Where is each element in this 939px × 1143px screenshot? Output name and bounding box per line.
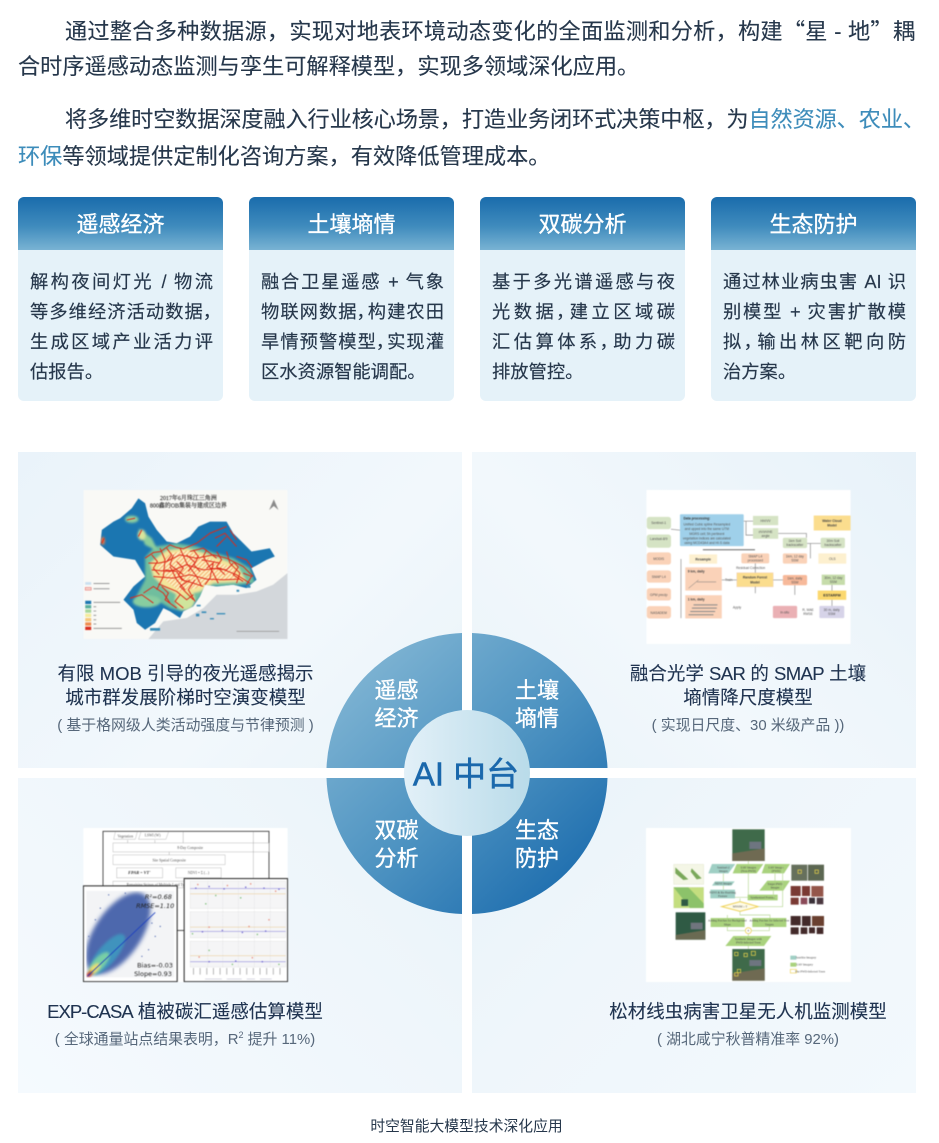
image: SMAP downscaling flow diagram: Apply (733, 605, 742, 609)
card: 土壤墒情: 融合卫星遥感 + 气象 (261, 271, 444, 292)
image: SMAP downscaling flow diagram: SSM (830, 580, 837, 584)
image: EXP-CASA flow chart and scatter plots: Remaining Strings of Multiple Land Types (127, 883, 190, 887)
title: night-light model: 有限 MOB 引导的夜光遥感揭示 (58, 663, 313, 684)
image: SMAP downscaling flow diagram: SSM (791, 580, 799, 584)
quadrant: 生态防护: 防护 (515, 846, 559, 871)
image: SMAP downscaling flow diagram: SSM (791, 559, 799, 563)
image: pine wilt monitoring flow diagram: MSSIM ≥ T (733, 905, 747, 909)
intro paragraph 2: 环保等领域提供定制化咨询方案，有效降低管理成本。 (18, 144, 550, 169)
title: SMAP downscaling model: 墒情降尺度模型 (683, 687, 813, 708)
image: SMAP downscaling flow diagram: SMAP L4 (652, 575, 666, 579)
quadrant: 遥感经济 (326, 633, 462, 768)
image: SMAP downscaling flow diagram: 1 km, daily (688, 598, 705, 602)
subtitle: pine wilt model: ( 湖北咸宁秋普精准率 92%) (657, 1032, 839, 1048)
card: 双碳分析: 双碳分析 (538, 212, 626, 237)
image: Pearl River Delta night-light map: 800鑫的OB集装与建成区边界 (150, 502, 227, 510)
image: pine wilt monitoring flow diagram: NDVI Images (715, 881, 733, 885)
image: SMAP downscaling flow diagram: 30m, 12 day (824, 576, 843, 580)
image: SMAP downscaling flow diagram: RMSE (803, 612, 814, 616)
image: SMAP downscaling flow diagram: 1km Soil (788, 539, 801, 543)
image: pine wilt monitoring flow diagram: Images (771, 886, 780, 890)
image: SMAP downscaling flow diagram: Landsat-8/9 (650, 537, 668, 541)
intro paragraph 2: 将多维时空数据深度融入行业核心场景，打造业务闭环式决策中枢，为自然资源、农业、 (65, 107, 925, 132)
card: 土壤墒情 (249, 197, 454, 401)
card: 遥感经济: 等多维经济活动数据， (30, 301, 213, 322)
quadrant: 双碳分析: 分析 (374, 846, 419, 871)
title: pine wilt model: 松材线虫病害卫星无人机监测模型 (609, 1001, 887, 1022)
card: 生态防护: 通过林业病虫害 AI 识 (723, 271, 906, 292)
image: SMAP downscaling flow diagram: vegetation indices are calculated (683, 536, 731, 540)
image: pine wilt monitoring flow diagram: Target PWD (768, 882, 783, 886)
image: pine wilt monitoring flow diagram (646, 828, 851, 982)
title: EXP-CASA model: EXP-CASA 植被碳汇遥感估算模型 (47, 1001, 323, 1022)
image: SMAP downscaling flow diagram: and upped into the same UTM (685, 527, 729, 531)
image: SMAP downscaling flow diagram: MODIS (653, 557, 665, 561)
quadrant: 土壤墒情: 墒情 (515, 706, 559, 731)
image: SMAP downscaling flow diagram: 9 km, daily (688, 569, 705, 573)
image: SMAP downscaling flow diagram: 30 m, daily (824, 608, 840, 612)
image: pine wilt monitoring flow diagram: Feature (718, 894, 728, 898)
image: pine wilt monitoring flow diagram: Satellite Imagery (796, 956, 817, 960)
image: pine wilt monitoring flow diagram: (PWD) (772, 869, 780, 873)
image: SMAP downscaling flow diagram: ESTARFM (823, 594, 841, 598)
image: SMAP downscaling flow diagram: Water Cloud (822, 519, 842, 523)
card: 遥感经济: 估报告。 (30, 361, 103, 382)
image: EXP-CASA flow chart and scatter plots (82, 828, 289, 983)
image: pine wilt monitoring flow diagram: Adding Patches for Background (708, 919, 747, 923)
image: pine wilt monitoring flow diagram: Synthetic Images with (735, 937, 762, 941)
hub: AI 中台 (404, 710, 530, 836)
title: night-light model: 城市群发展阶梯时空演变模型 (65, 687, 306, 708)
image: SMAP downscaling flow diagram: Data processing: (684, 517, 710, 521)
quadrant: 土壤墒情: 土壤 (515, 678, 559, 703)
title: SMAP downscaling model (630, 663, 866, 708)
image: EXP-CASA flow chart and scatter plots: NDVI = Σ (...) (188, 871, 210, 875)
image: SMAP downscaling flow diagram: OLS (829, 557, 836, 561)
subtitle: EXP-CASA model: ( 全球通量站点结果表明，R2 提升 11%) (55, 1030, 315, 1048)
image: SMAP downscaling flow diagram: Random Forest (743, 576, 768, 580)
panel: EXP-CASA model (18, 778, 462, 1093)
card: 土壤墒情: 区水资源智能调配。 (261, 361, 426, 382)
image: pine wilt monitoring flow diagram: Targets (765, 922, 775, 926)
image: pine wilt monitoring flow diagram: PWD-Infected Trees (736, 941, 762, 945)
intro paragraph 1 (18, 14, 915, 79)
image: EXP-CASA flow chart and scatter plots: Site Spatial Composite (153, 858, 186, 862)
image: SMAP downscaling flow diagram: HH/VV (761, 519, 771, 523)
image: SMAP downscaling flow diagram: SSM (828, 612, 835, 616)
image: SMAP downscaling flow diagram: NASADEM (651, 611, 667, 615)
chart: AI platform quadrant wheel (326, 633, 608, 914)
image: SMAP downscaling flow diagram: R, MAE (802, 608, 815, 612)
card: 双碳分析: 排放管控。 (492, 361, 583, 382)
image: SMAP downscaling flow diagram (646, 490, 852, 644)
image: SMAP downscaling flow diagram: Model (827, 524, 837, 528)
intro paragraph 2 (18, 107, 925, 169)
card: 双碳分析: 光数据，建立区域碳 (492, 301, 675, 322)
image: pine wilt monitoring flow diagram: Images (719, 869, 728, 873)
image: SMAP downscaling flow diagram: 1km, daily (787, 576, 803, 580)
image: EXP-CASA flow chart and scatter plots: 8-Day Composite (177, 846, 203, 850)
hub: AI 中台: AI 中台 (413, 756, 519, 792)
image: SMAP downscaling flow diagram: 30m Soil (827, 539, 840, 543)
panel: night-light model (18, 452, 462, 768)
image: SMAP downscaling flow diagram: in-situ (780, 610, 789, 614)
card: 双碳分析: 汇估算体系，助力碳 (492, 331, 675, 352)
quadrant: 生态防护: 生态 (515, 818, 559, 843)
image: EXP-CASA flow chart and scatter plots: LSWI (W) (145, 834, 161, 838)
image: pine wilt monitoring flow diagram: UAV Images (741, 866, 757, 870)
image: pine wilt monitoring flow diagram: Adding Patches for Infected Tree (749, 919, 790, 923)
image: pine wilt monitoring flow diagram: UAV Images (768, 866, 785, 870)
card: 土壤墒情: 土壤墒情 (307, 212, 396, 237)
title: night-light model (58, 663, 313, 708)
card: 生态防护 (711, 197, 916, 401)
quadrant: 遥感经济: 经济 (374, 706, 419, 731)
card: 遥感经济 (18, 197, 223, 401)
caption: 时空智能大模型技术深化应用 (370, 1119, 563, 1135)
image: SMAP downscaling flow diagram: backscatter (786, 543, 804, 547)
image: SMAP downscaling flow diagram: Train (725, 578, 733, 582)
card: 双碳分析 (480, 197, 685, 401)
image: SMAP downscaling flow diagram: Residual Correction (736, 566, 765, 570)
image: SMAP downscaling flow diagram: processed (748, 558, 763, 562)
image: SMAP downscaling flow diagram: Sentinel-1 (651, 521, 666, 525)
card: 双碳分析: 基于多光谱遥感与夜 (492, 271, 675, 292)
card: 生态防护: 别模型 + 灾害扩散模 (723, 301, 906, 322)
image: pine wilt monitoring flow diagram: Sentinel-2 (717, 865, 730, 869)
quadrant: 双碳分析 (326, 778, 462, 914)
image: SMAP downscaling flow diagram: σV/σVHE (759, 530, 773, 534)
quadrant: 土壤墒情 (472, 633, 608, 768)
image: pine wilt monitoring flow diagram: NDVI & Re-Enabling (709, 890, 736, 894)
image: pine wilt monitoring flow diagram: Synthesized Feature (751, 896, 775, 900)
image: pine wilt monitoring flow diagram: The PWD-Infected Trees (795, 969, 826, 973)
image: SMAP downscaling flow diagram: backscatter (825, 543, 842, 547)
card: 土壤墒情: 旱情预警模型，实现灌 (261, 331, 444, 352)
quadrant: 生态防护 (472, 778, 608, 914)
image: EXP-CASA flow chart and scatter plots: Vegetation (118, 834, 133, 838)
image: SMAP downscaling flow diagram: MGRS cell; 5h pertinent (689, 532, 724, 536)
image: EXP-CASA flow chart and scatter plots: Slope=0.93 (134, 970, 172, 978)
image: SMAP downscaling flow diagram: Unified Cubic spline Resampled (683, 523, 730, 527)
image: EXP-CASA flow chart and scatter plots: Bias=-0.03 (137, 961, 173, 969)
image: EXP-CASA flow chart and scatter plots: RMSE=1.10 (136, 902, 174, 910)
image: SMAP downscaling flow diagram: using MCD43A4 and HI-S data (684, 541, 730, 545)
image: SMAP downscaling flow diagram: 1km, 12 day (786, 555, 804, 559)
card: 遥感经济: 生成区域产业活力评 (30, 331, 213, 352)
card: 生态防护: 拟，输出林区靶向防 (723, 331, 906, 352)
card: 遥感经济: 解构夜间灯光 / 物流 (30, 271, 213, 292)
image: pine wilt monitoring flow diagram: + (747, 928, 750, 933)
title: SMAP downscaling model: 融合光学 SAR 的 SMAP 土壤 (630, 663, 866, 684)
image: EXP-CASA flow chart and scatter plots: FPAR = VT' (128, 870, 151, 875)
image: SMAP downscaling flow diagram: SMAP L4 (748, 554, 762, 558)
image: SMAP downscaling flow diagram: Model (750, 580, 760, 584)
image: EXP-CASA flow chart and scatter plots: R²=0.68 (145, 893, 172, 901)
card: 生态防护: 生态防护 (769, 212, 858, 237)
image: Pearl River Delta night-light map (84, 490, 288, 640)
panel: SMAP downscaling model (472, 452, 916, 768)
image: pine wilt monitoring flow diagram: (Non-PWD) (741, 869, 756, 873)
intro paragraph 1: 合时序遥感动态监测与孪生可解释模型，实现多领域深化应用。 (18, 54, 639, 79)
image: Pearl River Delta night-light map: 2017年6月珠江三角洲 (160, 494, 217, 502)
image: pine wilt monitoring flow diagram: Maps (724, 922, 731, 926)
image: SMAP downscaling flow diagram: angle (762, 534, 770, 538)
image: SMAP downscaling flow diagram: Resample (695, 557, 711, 561)
panel: pine wilt disease model (472, 778, 916, 1093)
quadrant: 双碳分析: 双碳 (374, 818, 419, 843)
subtitle: SMAP downscaling model: ( 实现日尺度、30 米级产品 )) (652, 718, 844, 734)
quadrant: 遥感经济: 遥感 (374, 678, 419, 703)
image: SMAP downscaling flow diagram: GPM precip (650, 593, 668, 597)
card: 土壤墒情: 物联网数据，构建农田 (261, 301, 444, 322)
card: 生态防护: 治方案。 (723, 361, 796, 382)
intro paragraph 1: 通过整合多种数据源，实现对地表环境动态变化的全面监测和分析，构建“星 - 地”耦 (65, 14, 915, 46)
card: 遥感经济: 遥感经济 (76, 212, 164, 237)
image: pine wilt monitoring flow diagram: UAV Imagery (796, 963, 814, 967)
subtitle: night-light model: ( 基于格网级人类活动强度与节律预测 ) (57, 718, 314, 734)
